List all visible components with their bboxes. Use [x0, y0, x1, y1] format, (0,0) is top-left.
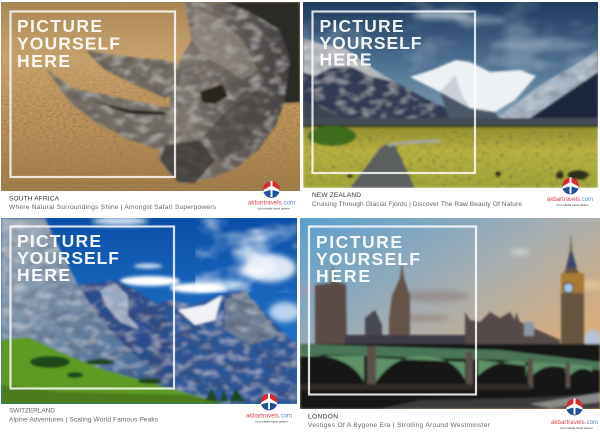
frame [312, 12, 475, 173]
caption: SOUTH AFRICA [9, 196, 60, 202]
logo: akbartravels.com [246, 414, 292, 420]
heading: PICTURE [320, 16, 404, 36]
heading: PICTURE [17, 231, 101, 251]
heading: HERE [316, 266, 370, 286]
logo: Your reliable travel partner [255, 420, 288, 424]
heading: YOURSELF [316, 249, 420, 269]
heading: PICTURE [316, 232, 402, 252]
heading [17, 16, 120, 71]
logo: Your reliable travel partner [560, 426, 593, 430]
logo: akbartravels.com [551, 420, 598, 426]
panel: New Zealand [303, 2, 598, 208]
logo [551, 398, 598, 430]
frame [309, 226, 476, 394]
logo [248, 181, 295, 210]
caption: Vestiges Of A Bygone Era | Strolling Around Westminster [308, 422, 491, 429]
heading [17, 231, 119, 285]
logo: akbartravels.com [547, 197, 593, 203]
heading: HERE [17, 51, 70, 71]
caption: NEW ZEALAND [312, 192, 361, 199]
photo: rhino in grass [1, 2, 300, 191]
caption: SWITZERLAND [9, 408, 55, 414]
caption: Cruising Through Glacial Fjords | Discover The Raw Beauty Of Nature [312, 201, 522, 208]
logo: Your reliable travel partner [257, 206, 290, 210]
photo: Westminster at dusk [291, 218, 600, 409]
heading: HERE [17, 265, 70, 285]
heading: HERE [320, 50, 372, 70]
heading: YOURSELF [17, 34, 120, 54]
frame [10, 226, 174, 388]
heading [316, 232, 420, 286]
heading [320, 16, 422, 70]
heading: YOURSELF [320, 33, 422, 53]
frame [10, 12, 175, 177]
panel: South Africa [1, 2, 300, 211]
caption [312, 192, 522, 208]
caption [9, 408, 159, 424]
photo: alpine peaks [1, 217, 301, 404]
caption: LONDON [308, 414, 338, 420]
logo [246, 394, 292, 424]
logo: akbartravels.com [248, 200, 295, 206]
photo: mountains and road [303, 2, 598, 188]
caption: Alpine Adventures | Scaling World Famous Peaks [9, 416, 159, 424]
panel: Switzerland [1, 217, 301, 424]
logo: Your reliable travel partner [556, 203, 589, 207]
heading: PICTURE [17, 16, 102, 36]
logo [547, 178, 593, 207]
panel: London [291, 218, 600, 430]
caption: Where Natural Surroundings Shine | Amongst Safari Superpowers [9, 204, 217, 211]
caption [9, 196, 217, 211]
heading: YOURSELF [17, 248, 119, 268]
caption [308, 414, 491, 429]
